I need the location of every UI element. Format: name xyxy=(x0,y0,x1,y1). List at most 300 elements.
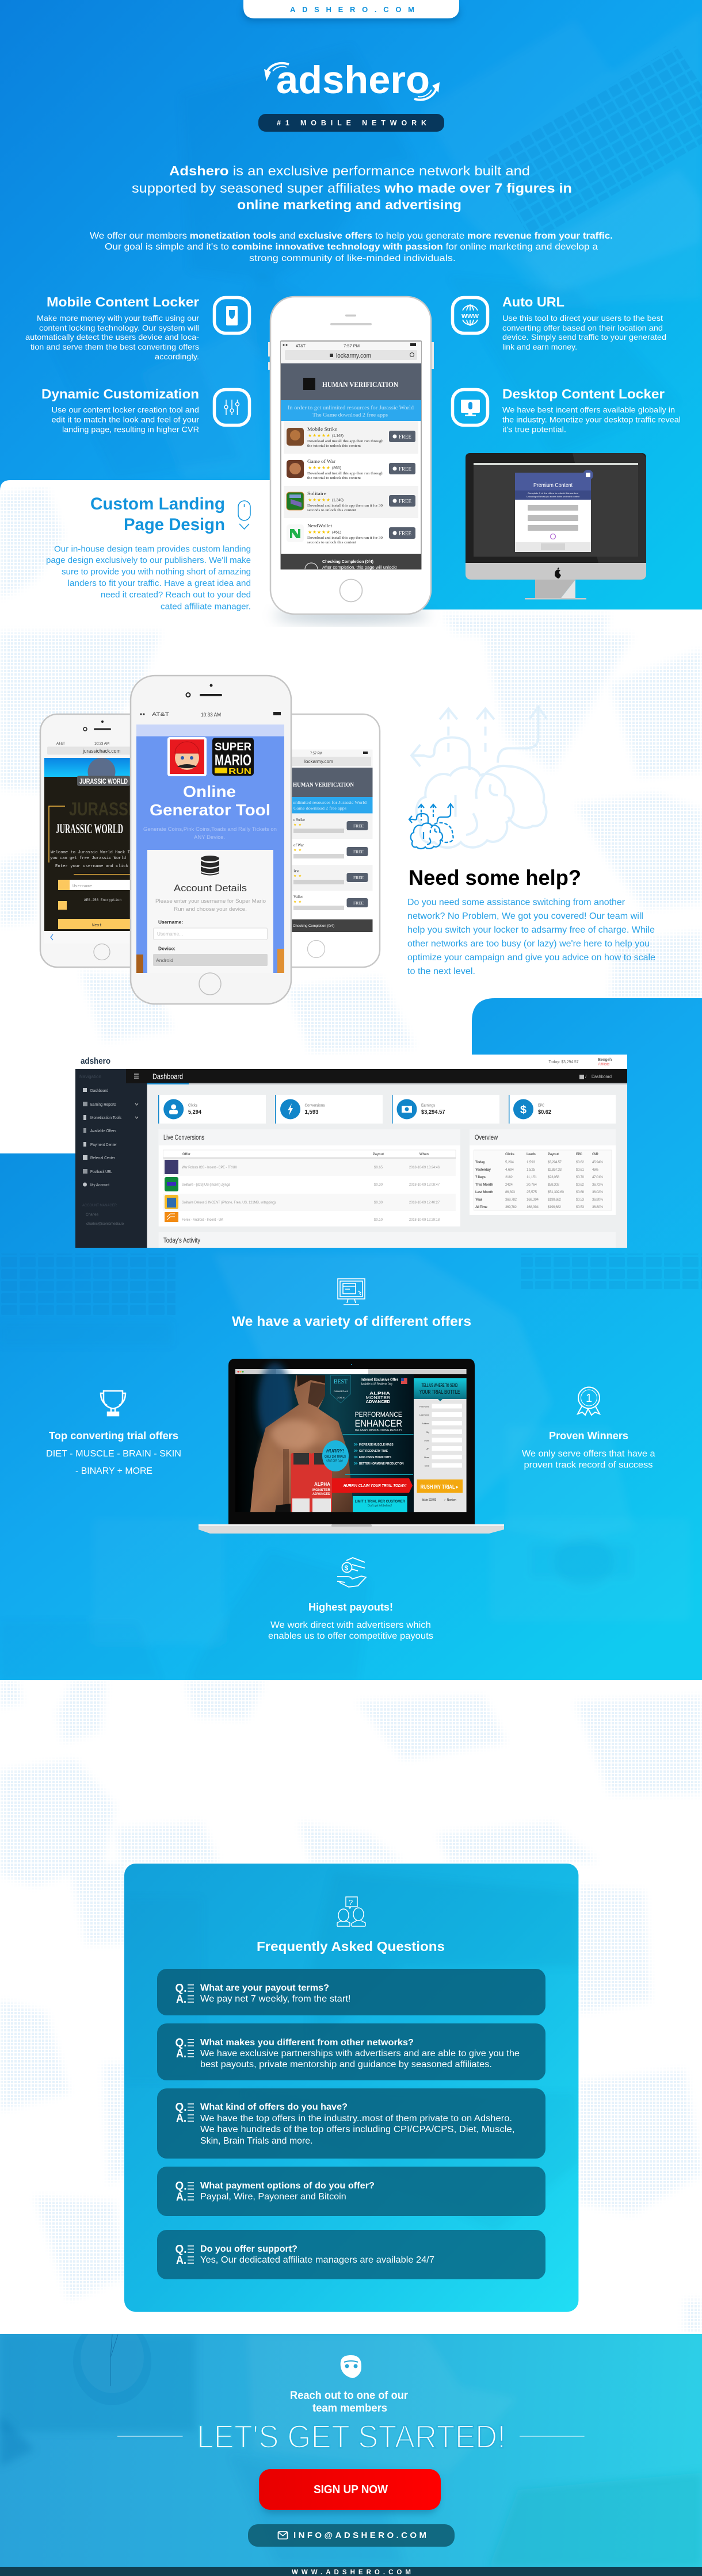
signup form: YOUR TRIAL BOTTLE xyxy=(419,1389,460,1396)
footer bar: WWW.ADSHERO.COM xyxy=(292,2569,411,2576)
phone mockup: Jurassic World generator: Enter your username and click xyxy=(55,864,128,869)
panel: overview: 369,782 xyxy=(505,1198,517,1202)
offer row: Mobile Strike: the tutorial to unlock this content xyxy=(307,444,361,448)
badge: #1 mobile network xyxy=(258,114,444,132)
contact pill: email xyxy=(248,2524,455,2547)
offer row: NerdWallet: Download and install this app then run it for 30 xyxy=(307,536,383,540)
offer type: Highest payouts!: Highest payouts! xyxy=(308,1601,393,1613)
best product badge xyxy=(330,1375,351,1403)
feature: Desktop Content Locker: We have best incent offers available globally in xyxy=(502,405,675,414)
phone mockup: Jurassic World generator: JURASSI xyxy=(69,799,132,819)
phone screen: HUMAN VERIFICATION xyxy=(322,381,398,389)
panel: overview: This Month xyxy=(475,1183,493,1187)
panel: overview: 1,525 xyxy=(526,1168,536,1172)
panel: overview: $3,294.57 xyxy=(548,1160,562,1164)
panel: overview: Payout xyxy=(548,1152,559,1156)
product bottles xyxy=(291,1453,332,1512)
feature: Auto URL xyxy=(502,294,666,351)
icon: medal xyxy=(578,1387,600,1415)
FAQ: payment options: A. xyxy=(176,2191,186,2203)
offer row: Solitaire: Download and install this app then run it for 30 xyxy=(307,504,383,508)
phone mockup: locker, right: unlimited resources for Jurassic World xyxy=(293,800,367,805)
feature: Dynamic Customization: Dynamic Customization xyxy=(41,386,199,401)
logo: Super Mario Run: MARIO xyxy=(215,752,251,769)
panel: live conversions xyxy=(159,1129,460,1226)
phone mockup: human verification locker xyxy=(268,297,434,614)
stat card: EPC: EPC xyxy=(538,1104,544,1107)
panel: overview: 2182 xyxy=(505,1175,513,1179)
phone mockup: Super Mario generator, centre: Username: xyxy=(158,919,183,925)
dashboard top bar: Affiliate xyxy=(598,1063,610,1066)
panel: live conversions: $0.30 xyxy=(374,1201,383,1205)
FAQ: what makes you different: best payouts, private mentorship and guidance by seasoned affiliates. xyxy=(200,2060,492,2069)
panel: live conversions: Solitaire Deluxe 2 INCENT (iPhone, Free, US, 121MB, w/tapping) xyxy=(182,1201,276,1205)
panel: overview: EPC xyxy=(576,1152,583,1156)
feature: Dynamic Customization xyxy=(41,386,199,434)
feature: Auto URL: device. Simply send traffic to your generated xyxy=(502,332,666,342)
FAQ: what makes you different: Q. xyxy=(175,2037,186,2049)
panel: live conversions: Offer xyxy=(182,1152,190,1156)
Premium Content popup: Unlocking will show you access to the protected content xyxy=(526,495,580,498)
FAQ: what makes you different: We have exclusive partnerships with advertisers and are able to give you the xyxy=(200,2049,520,2058)
logo: Super Mario Run: RUN xyxy=(228,766,251,776)
panel: live conversions: 2018-10-09 12:29:18 xyxy=(409,1218,440,1222)
offer headline copy: CUT RECOVERY TIME xyxy=(359,1450,388,1453)
panel: overview: 36.02% xyxy=(592,1190,603,1194)
panel: overview: 20,764 xyxy=(526,1183,537,1187)
browser chrome xyxy=(235,1369,467,1374)
dashboard screenshot xyxy=(75,1055,627,1248)
dashboard sidebar: Available Offers xyxy=(90,1128,116,1133)
phone mockup: locker, right: FREE xyxy=(353,850,364,854)
icon: sliders xyxy=(214,390,250,425)
phone mockup: Super Mario generator, centre: Android xyxy=(156,957,173,963)
FAQ: support: Do you offer support? xyxy=(200,2244,297,2254)
custom landing page heading: Page Design xyxy=(124,515,225,534)
phone mockup: Jurassic World generator: AT&T xyxy=(56,742,65,746)
background: white section xyxy=(403,610,702,632)
Premium Content popup xyxy=(515,470,593,552)
phone mockup: Super Mario generator, centre: Device: xyxy=(158,945,175,951)
panel: overview: 45% xyxy=(592,1168,598,1172)
signup form: ✓ Norton xyxy=(444,1498,456,1502)
background: dotted world map, FAQ section xyxy=(0,1681,702,2333)
panel: overview: 11,151 xyxy=(526,1175,537,1179)
stat card: conversions: 1,593 xyxy=(305,1109,319,1116)
panel: overview: Today xyxy=(475,1160,486,1164)
need some help description: optimize your campaign and give you advice on how to scale xyxy=(407,953,655,963)
phone screen: Checking Completion (0/4) xyxy=(322,559,373,564)
custom landing page description: need it created? Reach out to your ded xyxy=(101,591,251,600)
signup form: Email xyxy=(425,1464,429,1467)
panel: live conversions: Forex - Android - Incent - UK xyxy=(182,1218,224,1222)
icon: Mario xyxy=(167,737,207,776)
offer row: Mobile Strike: (1,148) xyxy=(332,434,344,438)
offer type: Top converting trial offers: Top converting trial offers xyxy=(49,1430,178,1442)
phone mockup: locker, right: Game download 2 free apps xyxy=(293,806,346,811)
need some help description: to the next level. xyxy=(407,967,475,976)
icon: mobile lock xyxy=(214,298,250,334)
custom landing page description: page design exclusively to our publishers. We'll make xyxy=(46,556,251,565)
FAQ: kinds of offers: We have hundreds of the top offers including CPI/CPA/CPS, Diet, Muscle, xyxy=(200,2125,514,2134)
dashboard sidebar: Referral Center xyxy=(90,1155,115,1160)
best product badge: RANKED #1 xyxy=(334,1390,349,1393)
offer row: Mobile Strike: Download and install this app then run through xyxy=(307,440,383,443)
dashboard sidebar: ACCOUNT MANAGER xyxy=(82,1203,117,1208)
feature: Dynamic Customization: edit it to match the look and feel of your xyxy=(52,415,199,424)
feature: Desktop Content Locker: the industry. Monetize your desktop traffic reveal xyxy=(502,415,681,424)
stat card: earnings: Earnings xyxy=(421,1104,435,1107)
intro headline: supported by seasoned super affiliates who made over 7 figures in xyxy=(132,181,572,195)
panel: overview: $58,302 xyxy=(548,1183,560,1187)
dashboard top bar: Bengeh xyxy=(598,1057,612,1062)
best product badge: BEST xyxy=(334,1378,348,1385)
offer type: Proven Winners: Proven Winners xyxy=(549,1430,628,1442)
phone mockup: Jurassic World generator: JURASSIC WORLD xyxy=(56,822,123,836)
offer row: Solitaire: ★★★★★ xyxy=(308,497,330,503)
panel: overview: $0.68 xyxy=(576,1190,585,1194)
icon: database xyxy=(201,856,219,875)
logo: adshero: adshero xyxy=(276,58,430,102)
feature: Auto URL: link and earn money. xyxy=(502,342,577,351)
offer row: NerdWallet: ★★★★★ xyxy=(308,530,330,535)
feature: Mobile Content Locker: accordingly. xyxy=(155,352,199,361)
panel: live conversions: $0.30 xyxy=(374,1183,383,1187)
offer row: Mobile Strike: FREE xyxy=(399,434,411,439)
top tab with site name xyxy=(243,0,459,21)
offer row: Game of War: Game of War xyxy=(307,458,335,464)
stat card: clicks xyxy=(158,1095,266,1124)
background: top blue hero xyxy=(0,0,702,610)
offer row: Mobile Strike: ★★★★★ xyxy=(308,433,330,438)
laptop mockup: offer landing page xyxy=(199,1359,504,1534)
panel: live conversions: Solitaire - [iOS] US (incent) Zynga xyxy=(182,1183,230,1187)
feature: Auto URL: Auto URL xyxy=(502,294,564,309)
heading: Frequently Asked Questions: Frequently Asked Questions xyxy=(257,1939,445,1954)
FAQ: kinds of offers: Skin, Brain Trials and more. xyxy=(200,2136,313,2146)
footer bar xyxy=(0,2567,702,2576)
stat card: clicks: 5,294 xyxy=(188,1109,201,1116)
phone screen: lockarmy.com xyxy=(336,352,371,359)
panel: overview: $2,857.33 xyxy=(548,1168,562,1172)
FAQ: what makes you different xyxy=(157,2023,545,2080)
panel: overview: Yesterday xyxy=(475,1168,491,1172)
button: sign up now xyxy=(259,2469,441,2513)
panel: live conversions: 2018-10-09 13:08:47 xyxy=(409,1183,440,1187)
phone mockup: Jurassic World generator: Next xyxy=(92,923,102,928)
phone mockup: Jurassic World generator: you can get free Jurassic World xyxy=(50,856,126,861)
panel: overview: $0.62 xyxy=(576,1160,585,1164)
FAQ: what makes you different: What makes you different from other networks? xyxy=(200,2038,414,2048)
signup form: Address xyxy=(422,1422,429,1425)
panel: overview: $0.53 xyxy=(576,1198,585,1202)
offer row: NerdWallet: seconds to unlock this content xyxy=(307,541,356,545)
icon: computer with offers xyxy=(338,1279,365,1305)
need some help description: help you switch your locker to adsarmy free of charge. While xyxy=(407,925,655,935)
offer row: NerdWallet: (451) xyxy=(332,530,341,535)
limit box: Don't get left behind! xyxy=(368,1504,392,1508)
phone screen: After completion, this page will unlock! xyxy=(322,565,397,570)
panel: live conversions: $0.10 xyxy=(374,1218,383,1222)
panel: overview: 47.01% xyxy=(592,1175,603,1179)
FAQ: kinds of offers: What kind of offers do you have? xyxy=(200,2102,348,2112)
phone mockup: Jurassic World generator: JURASSIC WORLD xyxy=(79,777,128,785)
phone mockup: Jurassic World generator: 10:33 AM xyxy=(94,742,109,746)
dashboard sidebar: Dashboard xyxy=(90,1088,108,1093)
phone screen: AT&T xyxy=(296,343,306,348)
offer type: Top converting trial offers xyxy=(46,1430,181,1476)
panel: overview: 86,393 xyxy=(505,1190,516,1194)
text: reach out to one of our team members: team members xyxy=(312,2402,387,2414)
offer type: Proven Winners: proven track record of success xyxy=(524,1460,653,1470)
feature: Desktop Content Locker: Desktop Content Locker xyxy=(502,386,665,401)
phone mockup: Super Mario generator, centre: Account Details xyxy=(174,883,247,894)
offer row: Mobile Strike xyxy=(284,421,418,454)
icon: www globe xyxy=(452,298,488,334)
phone mockup: Jurassic World generator: jurassichack.com xyxy=(82,748,121,754)
stat card: conversions xyxy=(275,1095,383,1124)
offer headline copy xyxy=(354,1377,407,1466)
stat card: EPC: $0.62 xyxy=(538,1109,551,1116)
phone mockup: Jurassic World generator: Welcome to Jurassic World Hack T xyxy=(51,850,130,855)
panel: overview: 7 Days xyxy=(475,1175,486,1179)
stat card: earnings xyxy=(392,1095,499,1124)
product bottles: ALPHA xyxy=(314,1482,330,1487)
panel: overview: Leads xyxy=(526,1152,536,1156)
FAQ: payout terms: We pay net 7 weekly, from the start! xyxy=(200,1994,351,2004)
icon: two people with question bubble xyxy=(337,1897,365,1926)
panel: overview: $0.62 xyxy=(576,1183,585,1187)
background: dotted world map, upper white section xyxy=(0,486,702,1059)
offer row: Game of War: (865) xyxy=(332,466,341,470)
custom landing page heading xyxy=(90,494,225,534)
signup form: TELL US WHERE TO SEND xyxy=(422,1383,458,1388)
best product badge: 2014 xyxy=(337,1396,345,1399)
stat card: clicks: Clicks xyxy=(188,1104,197,1107)
phone screen: 7:57 PM xyxy=(344,343,360,348)
FAQ: kinds of offers: Q. xyxy=(175,2101,186,2114)
phone mockup: locker, right: lockarmy.com xyxy=(304,758,333,764)
contact pill: email: INFO@ADSHERO.COM xyxy=(293,2531,426,2540)
phone mockup: Super Mario generator, centre xyxy=(131,676,291,1004)
signup form: ZIP xyxy=(426,1447,429,1450)
product bottles: MONSTER xyxy=(312,1488,330,1492)
icon: large faint brain with arrows xyxy=(411,707,547,848)
button: sign up now: SIGN UP NOW xyxy=(314,2483,388,2496)
top tab with site name: ADSHERO.COM xyxy=(290,5,414,14)
heading: We have a variety of different offers: We have a variety of different offers xyxy=(232,1314,471,1329)
background: white panel behind custom landing page xyxy=(0,480,299,632)
signup form xyxy=(414,1378,467,1512)
offer row: Solitaire xyxy=(284,486,418,518)
phone mockup: locker, right: HUMAN VERIFICATION xyxy=(293,782,354,788)
phone mockup: Super Mario generator, centre: AT&T xyxy=(152,712,169,717)
offer type: Top converting trial offers: DIET - MUSCLE - BRAIN - SKIN xyxy=(46,1449,181,1459)
FAQ: support: A. xyxy=(176,2254,186,2267)
panel: overview: 5,294 xyxy=(505,1160,514,1164)
panel: overview: 36.80% xyxy=(592,1205,603,1209)
dashboard sidebar: Earning Reports xyxy=(90,1102,116,1107)
hurry badge: SENT PER DAY! xyxy=(326,1460,343,1463)
phone screen: In order to get unlimited resources for Jurassic World xyxy=(288,405,414,411)
offer headline copy: PERFORMANCE xyxy=(355,1410,402,1419)
background: blue dashboard and offers section xyxy=(0,998,702,1680)
panel: overview: 1,593 xyxy=(526,1160,536,1164)
FAQ: payment options xyxy=(157,2167,545,2216)
offer headline copy: ADVANCED xyxy=(366,1400,390,1404)
limit box xyxy=(353,1496,407,1512)
dashboard top bar: Dashboard xyxy=(152,1073,183,1081)
limit box: LIMIT 1 TRIAL PER CUSTOMER xyxy=(355,1500,405,1504)
badge: #1 mobile network: #1 MOBILE NETWORK xyxy=(277,119,426,127)
offer row: Game of War: Download and install this app then run through xyxy=(307,472,383,476)
offer headline copy: INCREASE MUSCLE MASS xyxy=(359,1443,394,1447)
phone mockup: Super Mario generator, centre: 10:33 AM xyxy=(201,712,221,718)
signup form: First Name xyxy=(419,1405,430,1408)
logo: Super Mario Run xyxy=(212,738,254,776)
Premium Content popup: Premium Content xyxy=(533,482,573,489)
dashboard top bar: / xyxy=(585,1074,587,1079)
panel: live conversions: 2018-10-09 12:40:27 xyxy=(409,1201,440,1205)
intro paragraph: We offer our members monetization tools and exclusive offers to help you generate more revenue from your traffic. xyxy=(90,231,613,241)
phone mockup: Super Mario generator, centre: Online xyxy=(183,783,236,800)
offer row: Solitaire: seconds to unlock this content xyxy=(307,509,356,512)
panel: overview: Overview xyxy=(475,1133,498,1141)
shadow under main phone xyxy=(273,607,429,623)
panel: today's activity: Today's Activity xyxy=(163,1236,200,1244)
signup form: Last Name xyxy=(419,1413,430,1416)
FAQ: support xyxy=(157,2230,545,2279)
logo: Super Mario Run: SUPER xyxy=(215,741,251,753)
custom landing page description: sure to provide you with nothing short of amazing xyxy=(62,568,251,577)
Premium Content popup: Complete 1 of the offers to unlock this content xyxy=(528,492,579,494)
offer row: NerdWallet xyxy=(287,523,415,545)
FAQ: kinds of offers xyxy=(157,2088,545,2159)
dashboard sidebar: Charles xyxy=(86,1213,99,1217)
text: reach out to one of our team members xyxy=(290,2390,409,2414)
offer model figure xyxy=(250,1375,354,1512)
need some help description: other networks are too busy (or lazy) we're here to help you xyxy=(407,939,650,949)
panel: overview: 36.72% xyxy=(592,1183,603,1187)
panel: overview: $51,392.60 xyxy=(548,1190,564,1194)
offer row: Solitaire: (1,240) xyxy=(332,498,344,503)
panel: overview: $199,682 xyxy=(548,1198,562,1202)
panel: overview: 369,782 xyxy=(505,1205,517,1209)
intro paragraph: Our goal is simple and it's to combine innovative technology with passion for online marketing and develop a xyxy=(105,242,598,252)
product bottles: ADVANCED xyxy=(312,1493,331,1496)
phone mockup: Jurassic World generator: AES-256 Encryption xyxy=(84,898,121,902)
feature: Dynamic Customization: Use our content locker creation tool and xyxy=(52,405,199,414)
FAQ: payment options: Q. xyxy=(175,2180,186,2192)
dashboard top bar: adshero xyxy=(81,1056,110,1066)
stat card: EPC: $ xyxy=(520,1104,526,1116)
feature: Auto URL: converting offer based on their location and xyxy=(502,323,663,332)
icon: trophy xyxy=(101,1391,125,1416)
feature: Mobile Content Locker: tion and serve them the best converting offers xyxy=(30,342,199,351)
signup form: State xyxy=(424,1439,430,1442)
hurry badge: HURRY! xyxy=(326,1448,344,1454)
custom landing page description: cated affiliate manager. xyxy=(161,603,251,612)
panel: overview xyxy=(470,1129,616,1215)
offer row: Solitaire: Solitaire xyxy=(307,490,326,496)
offer type: Highest payouts! xyxy=(268,1601,433,1641)
offer headline copy: Internet Exclusive Offer xyxy=(361,1377,398,1382)
phone mockup: Super Mario generator, centre: ANY Device. xyxy=(194,834,225,841)
claim arrow: HURRY! CLAIM YOUR TRIAL TODAY! xyxy=(344,1484,407,1488)
offer row: Game of War: ★★★★★ xyxy=(308,465,330,470)
FAQ: support: Q. xyxy=(175,2243,186,2256)
signup form: RUSH MY TRIAL ▸ xyxy=(421,1484,458,1490)
phone mockup: locker, right: ★★ xyxy=(293,848,302,852)
panel: overview: CVR xyxy=(592,1152,599,1156)
panel: overview: 25,575 xyxy=(526,1190,537,1194)
text: reach out to one of our team members: Reach out to one of our xyxy=(290,2390,409,2402)
phone mockup: locker, right: Checking Completion (0/4) xyxy=(293,924,334,928)
panel: overview: Clicks xyxy=(505,1152,515,1156)
panel: live conversions: 2018-10-09 13:24:46 xyxy=(409,1166,440,1170)
custom landing page description xyxy=(46,545,251,612)
panel: overview: 4,694 xyxy=(505,1168,514,1172)
FAQ: kinds of offers: A. xyxy=(176,2112,186,2125)
FAQ: payout terms: A. xyxy=(176,1993,186,2006)
icon: two people with question bubble: ? xyxy=(349,1898,353,1907)
icon: hands with coin: $ xyxy=(344,1564,349,1572)
panel: overview: $0.61 xyxy=(576,1168,585,1172)
icon: small blue brain with arrows xyxy=(409,804,453,849)
feature: Auto URL: Use this tool to direct your users to the best xyxy=(502,313,663,323)
FAQ: payment options: What payment options of do you offer? xyxy=(200,2181,375,2191)
offer row: NerdWallet: FREE xyxy=(399,530,411,536)
offer headline copy: ENHANCER xyxy=(355,1418,402,1429)
hurry badge xyxy=(322,1440,349,1471)
phone mockup: locker, right: FREE xyxy=(353,876,364,880)
signup form: McAfee SECURE xyxy=(422,1498,436,1502)
FAQ: support: Yes, Our dedicated affiliate managers are available 24/7 xyxy=(200,2255,434,2265)
need some help description xyxy=(407,898,655,976)
panel: overview: $0.53 xyxy=(576,1205,585,1209)
phone mockup: locker, right: 7:57 PM xyxy=(310,752,322,756)
phone mockup: locker, right: ★★ xyxy=(293,823,302,827)
desktop monitor mockup xyxy=(466,453,646,599)
icon: desktop lock xyxy=(452,390,488,425)
heading: LET'S GET STARTED!: LET'S GET STARTED! xyxy=(197,2418,506,2455)
panel: overview: 45.94% xyxy=(592,1160,603,1164)
offer type: Highest payouts!: We work direct with advertisers which xyxy=(270,1620,431,1630)
panel: live conversions: War Robots IOS - Incent - CPE - FR/UK xyxy=(182,1166,238,1170)
claim arrow xyxy=(332,1478,413,1493)
panel: live conversions: Live Conversions xyxy=(163,1133,204,1141)
background: bottom call-to-action section xyxy=(0,2318,702,2567)
dashboard sidebar xyxy=(75,1069,147,1248)
custom landing page description: landers to fit your traffic. Have a great idea and xyxy=(68,579,251,588)
phone screen: The Game download 2 free apps xyxy=(312,412,388,419)
panel: overview: 2424 xyxy=(505,1183,513,1187)
phone mockup: locker, right: FREE xyxy=(353,824,364,829)
offer row: Solitaire: FREE xyxy=(399,498,411,504)
need some help description: Do you need some assistance switching from another xyxy=(407,898,625,907)
need some help description: network? No Problem, We got you covered! Our team will xyxy=(407,911,643,921)
phone mockup: locker, right: ★★ xyxy=(293,874,302,878)
panel: overview: 168,394 xyxy=(526,1205,539,1209)
intro paragraph: strong community of like-minded individuals. xyxy=(249,254,456,263)
intro headline: online marketing and advertising xyxy=(237,197,461,212)
dashboard sidebar: charles@iconicmedia.io xyxy=(86,1222,124,1226)
phone mockup: Jurassic World generator xyxy=(40,714,155,967)
signup form: City xyxy=(426,1431,429,1433)
offer headline copy: BETTER HORMONE PRODUCTION xyxy=(359,1462,404,1466)
dashboard sidebar: My Account xyxy=(90,1182,110,1187)
panel: live conversions: When xyxy=(419,1152,429,1156)
